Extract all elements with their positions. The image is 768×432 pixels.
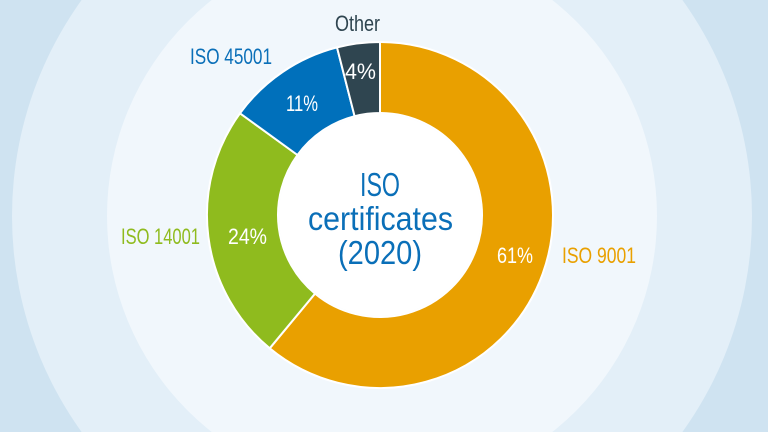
center title <box>308 166 453 271</box>
percentage labels: 61% <box>497 243 533 268</box>
category labels: ISO 14001 <box>121 224 200 249</box>
segment: ISO 9001 61% <box>270 42 553 388</box>
center title: (2020) <box>338 234 422 271</box>
donut chart <box>207 42 553 388</box>
center circle <box>279 114 481 316</box>
center title: certificates <box>308 200 453 237</box>
center title: ISO <box>360 166 400 203</box>
category labels: Other <box>335 11 380 36</box>
percentage labels <box>228 59 533 268</box>
segment: ISO 14001 24% <box>207 113 315 348</box>
category labels <box>121 11 636 268</box>
percentage labels: 4% <box>345 59 376 84</box>
segment: Other 4% <box>337 42 380 116</box>
percentage labels: 11% <box>286 91 318 116</box>
segment: ISO 45001 11% <box>240 47 355 155</box>
category labels: ISO 45001 <box>190 44 272 69</box>
percentage labels: 24% <box>228 224 267 249</box>
category labels: ISO 9001 <box>562 243 636 268</box>
